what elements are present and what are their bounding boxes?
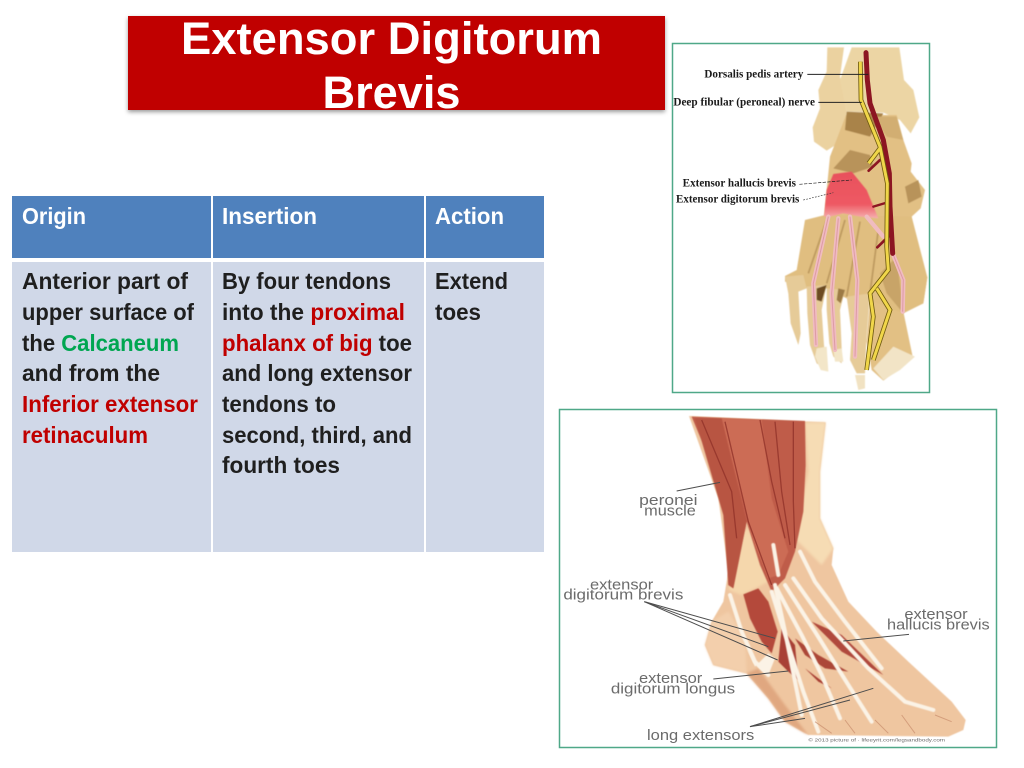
muscle: extensor digitorum brevis belly	[824, 172, 878, 218]
insertion text: phalanx of big toe	[222, 330, 412, 356]
labels and leader lines: Extensor digitorum brevis	[676, 192, 800, 206]
title banner	[128, 13, 665, 118]
labels: peronei	[639, 492, 697, 509]
labels and leader lines: Deep fibular (peroneal) nerve	[673, 94, 816, 108]
table header row: Origin	[22, 203, 86, 229]
bone shading lines	[808, 220, 878, 297]
insertion text	[222, 268, 412, 478]
labels and leader lines: Extensor hallucis brevis	[683, 176, 796, 190]
insertion text: fourth toes	[222, 452, 340, 478]
table header row: Action	[435, 203, 504, 229]
peroneal and leg muscles	[692, 417, 806, 592]
labels: hallucis brevis	[887, 616, 990, 633]
labels	[563, 492, 990, 744]
table header row: Insertion	[222, 203, 317, 229]
table body row	[12, 262, 544, 552]
action text	[435, 268, 508, 325]
labels: extensor	[904, 606, 968, 623]
labels: digitorum brevis	[563, 586, 683, 603]
muscle fibre lines	[702, 420, 795, 585]
origin text: the Calcaneum	[22, 330, 179, 356]
labels: long extensors	[647, 727, 754, 744]
table header row	[12, 196, 544, 258]
labels: © 2013 picture of · lifeeyrit.com/legsandbody.com	[808, 737, 945, 744]
image panel: lateral view of lower leg and foot muscles	[560, 410, 996, 748]
origin text	[22, 268, 198, 448]
deep fibular nerve	[860, 62, 890, 370]
action text: toes	[435, 299, 481, 325]
toe outlines	[815, 715, 952, 733]
labels and leader lines	[673, 66, 868, 206]
action text: Extend	[435, 268, 508, 294]
tendons to toes	[813, 217, 903, 357]
origin text: Anterior part of	[22, 268, 188, 294]
insertion text: and long extensor	[222, 360, 412, 386]
skin of leg and foot	[689, 416, 966, 737]
white retinaculum patch	[747, 648, 775, 675]
labels: extensor	[590, 576, 653, 593]
origin text: and from the	[22, 360, 160, 386]
insertion text: By four tendons	[222, 268, 391, 294]
insertion text: into the proximal	[222, 299, 405, 325]
labels and leader lines: Dorsalis pedis artery	[704, 66, 803, 80]
labels: extensor	[639, 670, 702, 687]
labels: digitorum longus	[611, 680, 735, 697]
title banner: Brevis	[322, 67, 460, 118]
extensor digitorum brevis muscle	[743, 588, 883, 688]
artery	[866, 53, 893, 253]
origin text: retinaculum	[22, 422, 148, 448]
origin text: upper surface of	[22, 299, 194, 325]
origin text: Inferior extensor	[22, 391, 198, 417]
insertion text: tendons to	[222, 391, 336, 417]
bones of the foot	[785, 47, 927, 390]
long extensor tendons	[730, 545, 933, 732]
shaded skin on heel and inner ankle	[795, 422, 833, 565]
labels: muscle	[644, 502, 696, 519]
insertion text: second, third, and	[222, 422, 412, 448]
image panel: dorsal foot bones with artery and nerve	[672, 44, 930, 392]
title banner: Extensor Digitorum	[181, 13, 602, 64]
table: origin, insertion, action	[12, 196, 544, 552]
leader lines	[644, 482, 909, 727]
